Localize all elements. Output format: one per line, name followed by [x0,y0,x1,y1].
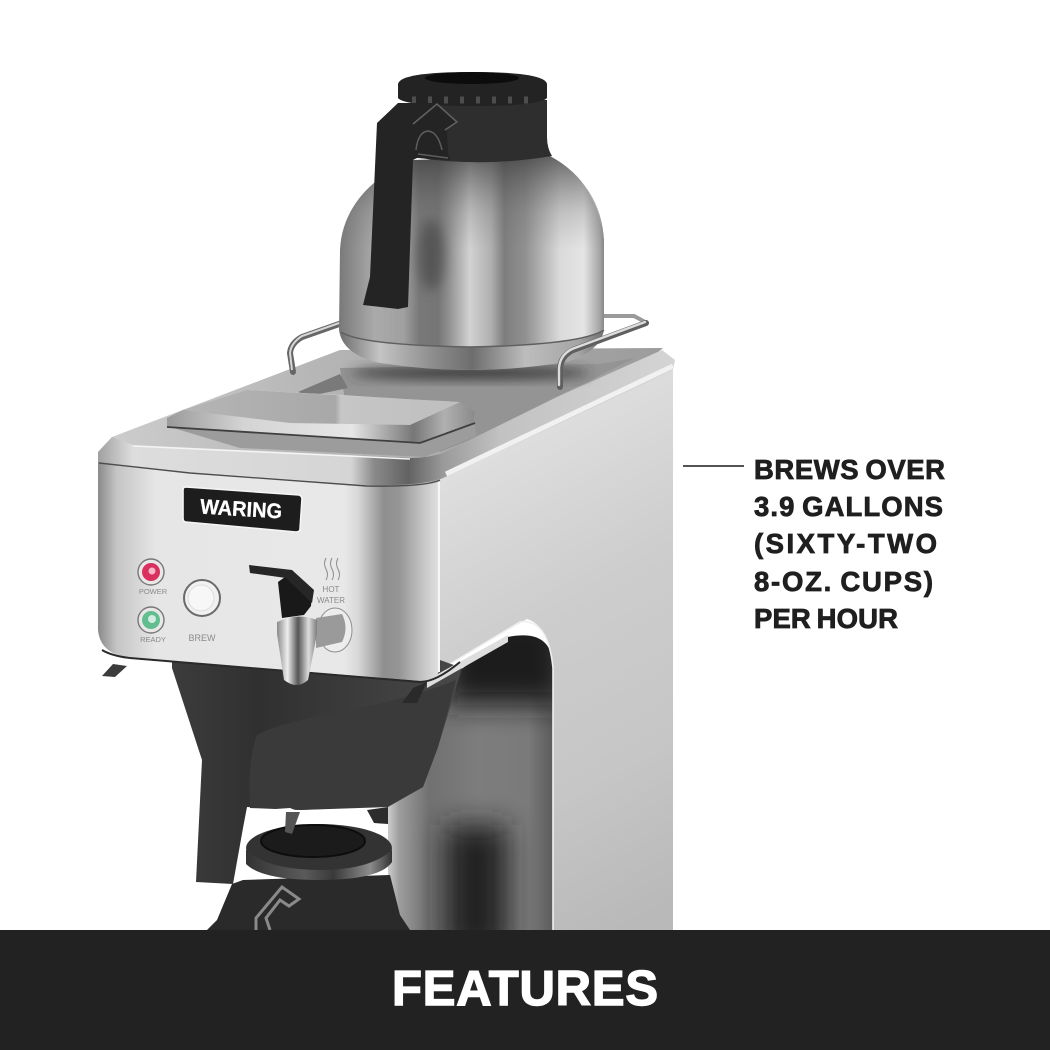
top carafe [290,72,647,387]
callout text: BREWS OVER [754,454,945,485]
hot water tap [249,565,352,685]
ready ring [138,607,164,633]
callout leader line [683,465,744,467]
callout text: PER HOUR [754,603,898,634]
lid opening [261,825,365,857]
tap spout [277,616,317,685]
rim highlight left [133,446,410,459]
power ring [138,559,164,585]
carafe dark reflection [419,219,443,291]
right clip [402,682,427,703]
tap pipe [316,614,346,648]
logo wordmark: WARING [199,496,283,523]
hopper tray [170,423,476,457]
power light [142,563,160,581]
carafe base band [340,330,604,370]
ready glint [148,615,156,623]
coffee brewer machine [98,72,675,955]
callout text [754,454,945,634]
right rail back [604,316,647,323]
lower carafe lid [246,824,392,872]
carafe body [339,156,604,370]
hot water label second line: WATER [317,596,345,605]
brew cap [188,585,214,611]
seam [438,482,440,672]
carafe shoulder shade [340,156,604,250]
bottom edge [102,650,460,682]
left rail back [290,323,342,372]
lid ring [246,850,392,880]
drip gap [247,808,374,831]
lower carafe [207,812,410,930]
front head panel [98,460,440,681]
plate reflection [340,358,635,452]
lower carafe neck [207,875,410,930]
right rail highlight [559,322,645,385]
lower column recess [388,635,552,930]
footer band [0,930,1050,1050]
carafe neck [412,100,552,162]
basket front contour [249,680,456,810]
feature callout [683,454,945,634]
brew label: BREW [188,633,216,643]
logo plate [183,487,302,532]
left rail highlight [290,322,342,370]
top plate [100,348,663,470]
lower handle hook [256,887,299,930]
callout text: 8-OZ. CUPS) [754,566,933,597]
left clip [102,664,127,677]
logo frame [183,487,302,532]
ready label: READY [140,635,166,644]
power button [138,559,168,596]
ready button [138,607,166,644]
handle hook outline [413,104,457,130]
carafe shadow on plate [350,367,590,379]
hopper lid top face [183,390,460,425]
right side panel [440,368,673,930]
right rail front [560,323,646,387]
rim shadow line [99,463,440,486]
spout tip [285,812,300,834]
handle hook window [416,131,448,158]
tap lever [249,565,314,603]
lid opening [425,72,519,84]
power label: POWER [139,587,168,596]
ready light [142,611,160,629]
footer heading: FEATURES [392,962,658,1016]
brew ring [184,580,220,616]
power glint [148,568,156,574]
hopper lid [167,390,475,443]
footer background [0,930,1050,1050]
silver strip under arch [427,635,508,688]
rail shadow on plate [298,374,348,396]
tap handle base [278,572,312,618]
carafe lid [398,72,547,106]
brew basket [172,660,462,884]
steam icon [324,558,340,580]
callout text: 3.9 GALLONS [754,491,943,522]
tap flange [318,608,352,652]
rim highlight right [446,366,673,474]
carafe handle [363,103,458,309]
lid knurling [412,96,536,104]
carafe base line [341,330,604,347]
arch edge [440,622,553,930]
basket outlet shard [367,807,388,824]
hopper lid edge [167,423,475,443]
hot water icon and label [317,558,345,605]
plate front rim [98,350,675,485]
hot water label: HOT [323,585,340,594]
brew button [184,580,220,643]
callout text: (SIXTY-TWO [754,528,937,559]
